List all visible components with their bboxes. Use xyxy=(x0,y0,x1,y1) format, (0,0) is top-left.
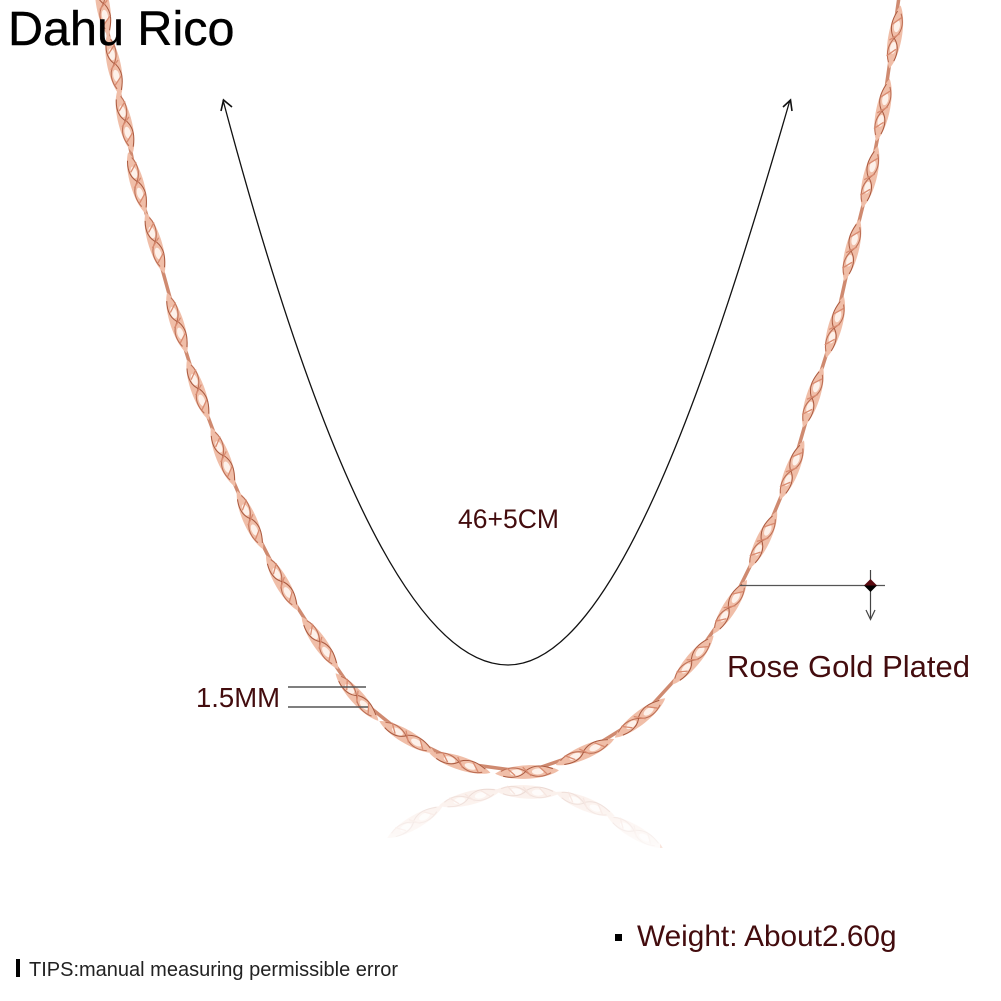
weight bullet xyxy=(615,934,622,941)
chain reflection xyxy=(350,780,666,865)
material callout line and marker xyxy=(740,570,885,620)
width label: 1.5MM xyxy=(196,682,280,713)
chain width marker lines xyxy=(288,687,368,707)
length arrow curve xyxy=(221,100,792,665)
length label: 46+5CM xyxy=(458,504,559,534)
weight label: Weight: About2.60g xyxy=(637,920,897,953)
rose gold necklace chain xyxy=(91,0,907,780)
tips note: TIPS:manual measuring permissible error xyxy=(29,959,398,981)
material label: Rose Gold Plated xyxy=(727,649,970,684)
brand title: Dahu Rico xyxy=(8,2,234,56)
tips marker bar xyxy=(16,959,20,977)
